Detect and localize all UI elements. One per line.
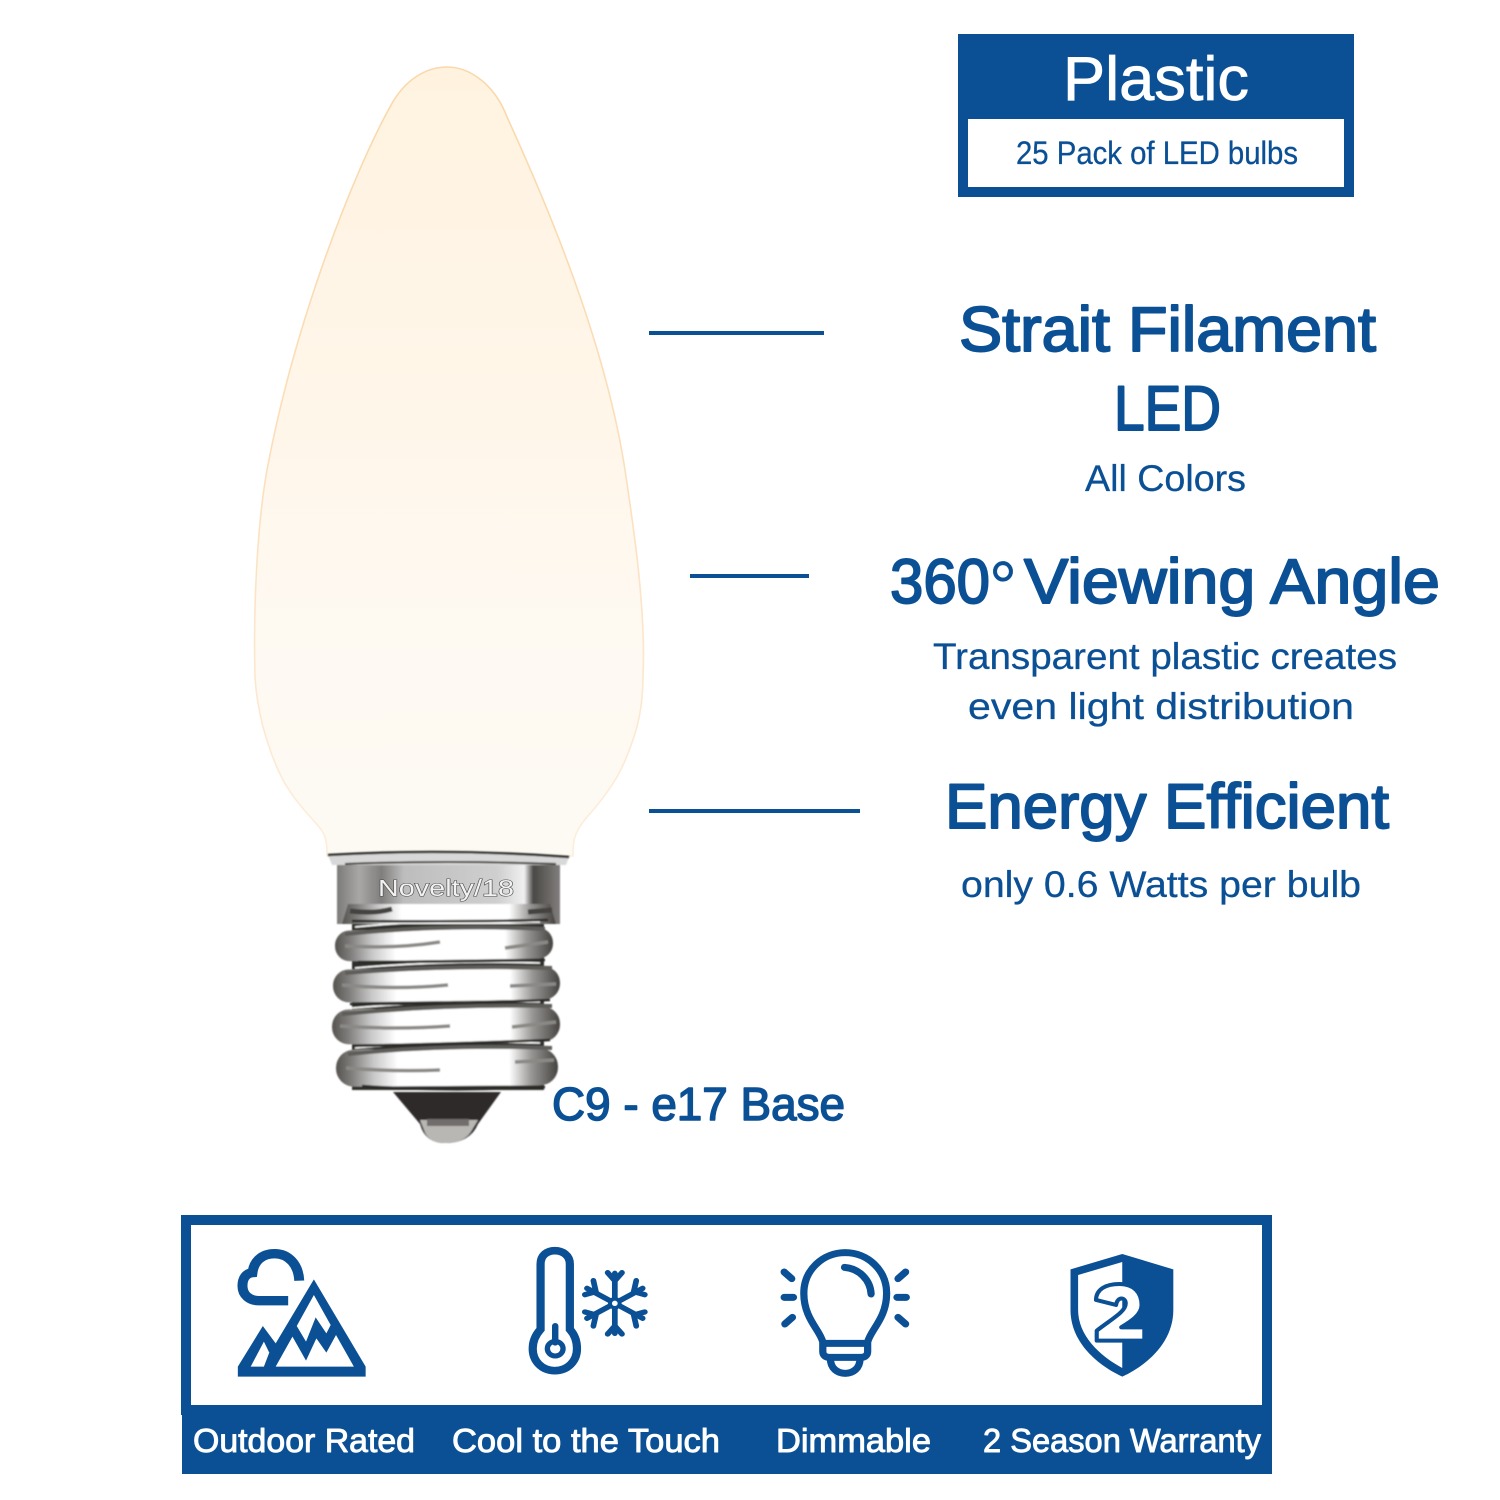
metal contact tip: [393, 1092, 501, 1143]
feature: 360 viewing angle: Transparent plastic creates: [933, 636, 1397, 677]
label: warranty: 2 Season Warranty: [983, 1422, 1261, 1459]
feature: strait filament LED: Strait Filament: [959, 295, 1377, 365]
feature: 360 viewing angle: 360: [890, 547, 990, 617]
feature: 360 viewing angle: °: [989, 548, 1017, 628]
feature: strait filament LED: LED: [1114, 374, 1221, 444]
feature: strait filament LED: [959, 295, 1377, 499]
feature: 360 viewing angle: Viewing Angle: [1024, 547, 1440, 617]
label: cool to the touch: Cool to the Touch: [452, 1422, 720, 1459]
label: outdoor rated: Outdoor Rated: [193, 1422, 415, 1459]
feature: energy efficient: only 0.6 Watts per bulb: [961, 864, 1361, 905]
feature: 360 viewing angle: [890, 547, 1440, 727]
icon: thermometer and snowflake: [533, 1251, 645, 1371]
badge title: Plastic: [1063, 45, 1249, 114]
callout line: energy: [649, 809, 860, 813]
icon: cloud and mountains: [238, 1254, 366, 1377]
bulb glass: [255, 67, 643, 856]
feature: energy efficient: [945, 772, 1390, 905]
icon: dimmable bulb: [784, 1253, 906, 1373]
badge: plastic: [958, 34, 1354, 197]
bulb photo illustration: [255, 67, 643, 1143]
icon: warranty shield: [1071, 1254, 1173, 1377]
label: dimmable: Dimmable: [776, 1422, 931, 1459]
badge subtitle: 25 Pack of LED bulbs: [1016, 135, 1298, 171]
callout line: filament: [649, 331, 824, 335]
base label: C9 - e17 Base: [552, 1078, 845, 1130]
neck behind threads: [352, 920, 544, 1090]
metal screw base: [328, 852, 569, 1090]
embossed lettering: Novelty/18: [378, 875, 514, 901]
feature: strait filament LED: All Colors: [1085, 458, 1246, 499]
panel: feature icons: [181, 1215, 1272, 1474]
feature: 360 viewing angle: even light distribution: [968, 686, 1354, 727]
callout line: viewing angle: [690, 574, 809, 578]
feature: energy efficient: Energy Efficient: [945, 772, 1390, 842]
